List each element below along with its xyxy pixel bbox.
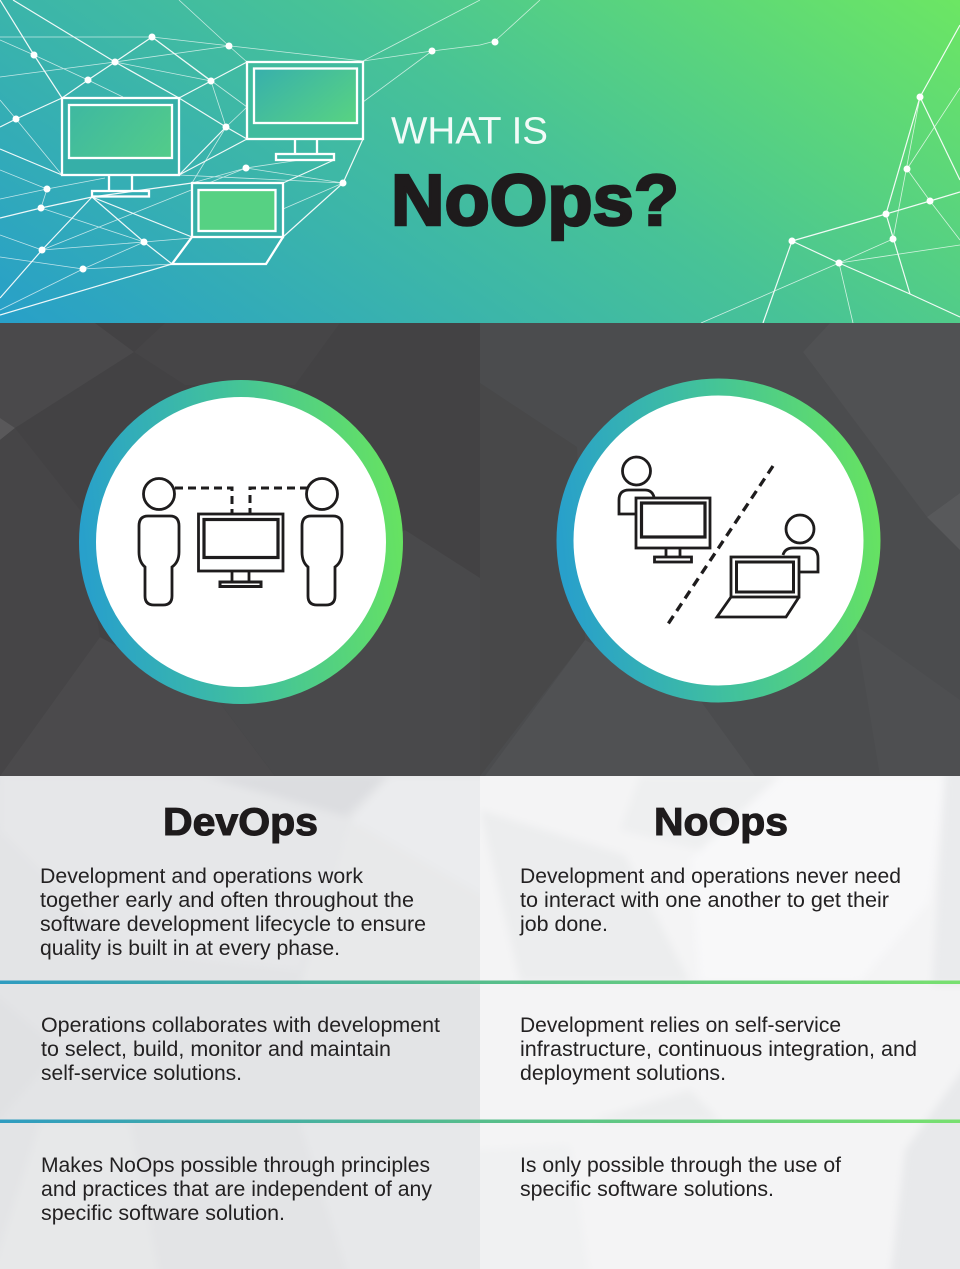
- divider: row two: [0, 1120, 960, 1123]
- panel: NoOps text column: [470, 770, 960, 1269]
- title: what is: WHAT IS: [391, 110, 548, 152]
- text block: DevOps point 3: [41, 1154, 432, 1225]
- network lines right: [701, 25, 960, 323]
- text block: DevOps point 1: together early and often throughout the: [40, 889, 414, 912]
- text block: DevOps point 2: Operations collaborates with development: [41, 1014, 440, 1037]
- text block: NoOps point 2: infrastructure, continuous integration, and: [520, 1038, 917, 1061]
- text block: NoOps point 3: Is only possible through the use of: [520, 1154, 841, 1177]
- text block: DevOps point 1: [40, 865, 426, 960]
- icon: people working separately: [619, 457, 818, 624]
- text block: NoOps point 2: deployment solutions.: [520, 1062, 726, 1085]
- text block: NoOps point 3: specific software solutions.: [520, 1178, 774, 1201]
- heading: DevOps: DevOps: [163, 801, 318, 844]
- ring: NoOps: [565, 387, 872, 694]
- network nodes: [12, 34, 934, 272]
- network lines left: [0, 0, 540, 315]
- text block: DevOps point 3: and practices that are independent of any: [41, 1178, 432, 1201]
- text block: NoOps point 2: Development relies on self-service: [520, 1014, 841, 1037]
- title: NoOps?: NoOps?: [391, 161, 679, 241]
- text block: DevOps point 3: specific software solution.: [41, 1202, 285, 1225]
- text block: DevOps point 1: software development lifecycle to ensure: [40, 913, 426, 936]
- text block: NoOps point 3: [520, 1154, 841, 1201]
- text block: NoOps point 1: to interact with one another to get their: [520, 889, 889, 912]
- panel: dark DevOps illustration background: [0, 323, 480, 776]
- text block: NoOps point 2: [520, 1014, 917, 1085]
- icon: right desktop monitor: [247, 62, 363, 160]
- text block: NoOps point 1: Development and operations never need: [520, 865, 901, 888]
- panel: DevOps text column: [0, 776, 490, 1269]
- text block: DevOps point 2: [41, 1014, 440, 1085]
- text block: DevOps point 2: to select, build, monitor and maintain: [41, 1038, 391, 1061]
- panel: header banner: [0, 0, 960, 323]
- text block: NoOps point 1: [519, 865, 901, 936]
- heading: NoOps: NoOps: [654, 801, 788, 844]
- divider: row one: [0, 980, 960, 984]
- text block: DevOps point 2: self-service solutions.: [41, 1062, 242, 1085]
- icon: two people sharing a monitor: [139, 478, 342, 605]
- icon: left desktop monitor: [62, 98, 179, 196]
- text block: DevOps point 1: quality is built in at every phase.: [40, 937, 340, 960]
- panel: dark NoOps illustration background: [480, 323, 960, 776]
- text block: DevOps point 3: Makes NoOps possible through principles: [41, 1154, 430, 1177]
- text block: NoOps point 1: job done.: [519, 913, 608, 936]
- ring: DevOps: [88, 388, 394, 696]
- icon: laptop: [172, 183, 283, 264]
- text block: DevOps point 1: Development and operations work: [40, 865, 364, 888]
